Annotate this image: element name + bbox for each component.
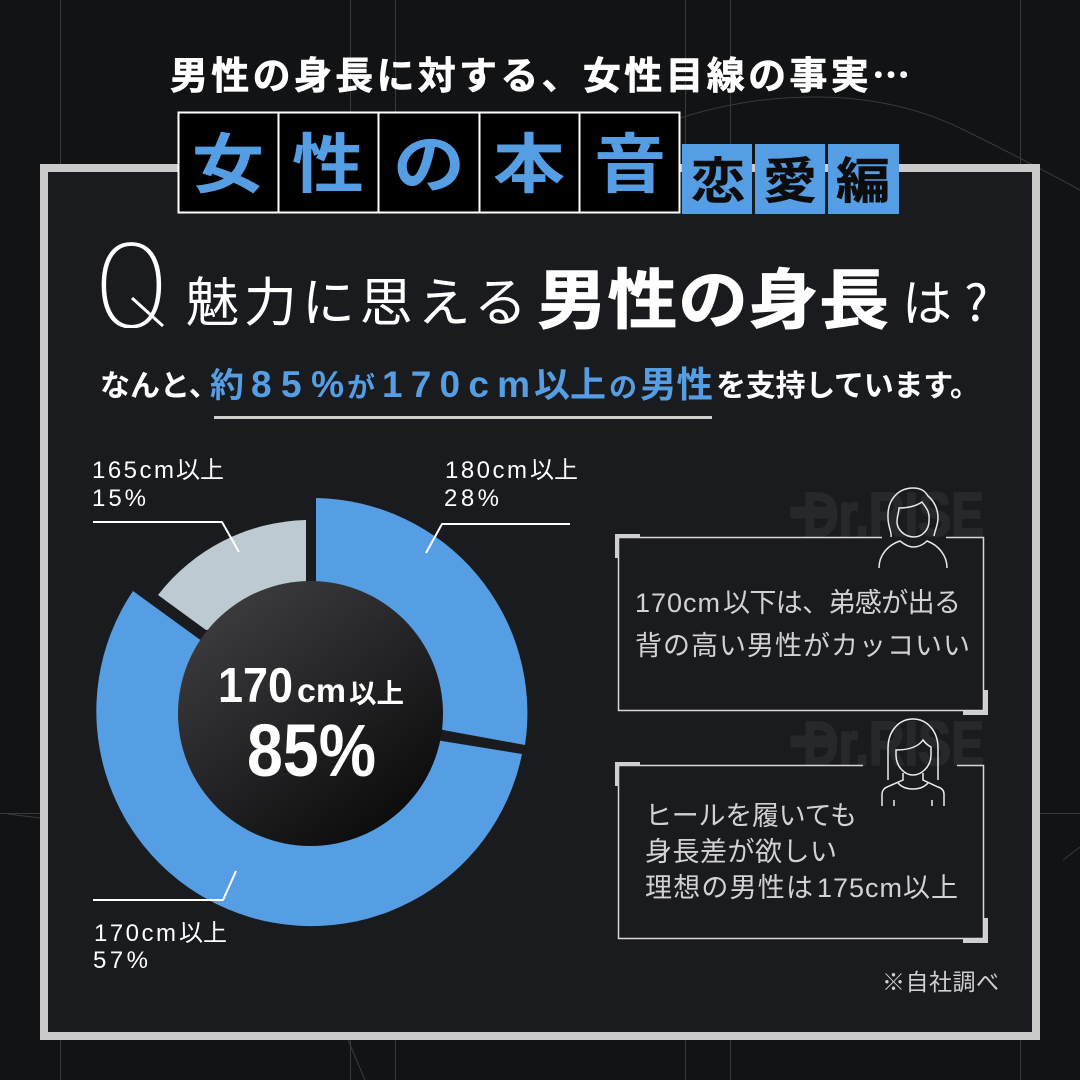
source note: ※自社調べ — [882, 963, 999, 997]
lead sentence — [100, 356, 980, 408]
lead sentence: の — [609, 366, 637, 406]
comment text 2 — [645, 794, 958, 905]
lead sentence: 170cm — [382, 364, 530, 405]
hub text: 170cm以上: 170 — [218, 659, 293, 713]
watermark logo 1: Dr.RISE — [803, 481, 984, 550]
lead sentence: が — [347, 366, 375, 406]
lead sentence: 約 — [210, 358, 244, 407]
label: 165cm: 165cm — [92, 457, 174, 484]
comment text 2: 175cm — [817, 873, 902, 903]
subtitle: 男性の身長に対する、女性目線の事実… — [170, 45, 910, 100]
label: 170cm — [93, 871, 236, 974]
hub text: 170cm以上: 以上 — [349, 672, 404, 711]
comment box 1 — [617, 488, 986, 713]
panel: main frame — [44, 168, 1036, 1036]
segment: 180cm 28% — [316, 498, 527, 745]
title tag: 恋愛編 — [682, 141, 899, 214]
label: 165cm — [92, 450, 239, 552]
title: 女性の本音: の — [393, 112, 465, 206]
label: 180cm: 180cm — [445, 457, 527, 484]
title tag: 恋愛編: 愛 — [763, 141, 817, 212]
watermark logo 2: Dr.RISE — [803, 710, 984, 779]
lead sentence: 男性 — [640, 356, 713, 408]
comment box 2 — [617, 719, 986, 941]
question mark letter Q: Q — [95, 213, 168, 359]
title: 女性の本音 — [178, 112, 680, 213]
title tag: 恋愛編: 編 — [836, 141, 890, 212]
hub text: 170cm以上 — [218, 659, 404, 713]
lead sentence: 以上 — [534, 357, 606, 408]
comment text 1 — [635, 581, 970, 663]
hub text: 170cm以上: cm — [297, 672, 346, 709]
question heading: 魅力に思える — [186, 261, 527, 337]
segment: 165cm 15% — [158, 520, 306, 630]
title: 女性の本音: 音 — [594, 112, 666, 206]
title tag: 恋愛編: 恋 — [691, 141, 745, 212]
segment: 170cm 57% — [96, 591, 522, 926]
comment text 1: 170cm — [635, 588, 720, 618]
icon: woman with long hair — [882, 719, 944, 806]
comment text 2: ヒールを履いても — [645, 794, 857, 833]
question heading: は? — [902, 264, 988, 336]
label: 170cm: 以上 — [179, 913, 227, 948]
title: 女性の本音: 女 — [192, 112, 264, 206]
title: 女性の本音: 本 — [493, 112, 565, 206]
comment text 2: 身長差が欲しい — [645, 830, 837, 869]
label: 170cm: 170cm — [94, 920, 176, 947]
label: 180cm: 以上 — [530, 450, 578, 485]
question heading: 男性の身長 — [537, 249, 889, 342]
title: 女性の本音: 性 — [292, 112, 364, 206]
lead sentence: を支持しています。 — [716, 361, 980, 405]
donut hub — [178, 581, 443, 846]
label: 165cm: 以上 — [176, 450, 224, 485]
comment text 2: 以上 — [903, 866, 958, 905]
label: 170cm: 57% — [93, 947, 148, 974]
hub value: 85%: 85% — [247, 709, 376, 792]
label: 165cm: 15% — [92, 485, 146, 512]
comment text 1: 背の高い男性がカッコいい — [635, 624, 970, 663]
comment text 1: 以下は、弟感が出る — [723, 581, 961, 620]
comment text 2: 理想の男性は — [645, 866, 813, 905]
donut chart — [96, 498, 527, 926]
label: 180cm — [426, 450, 578, 553]
label: 180cm: 28% — [444, 485, 499, 512]
lead sentence: なんと、 — [100, 361, 219, 405]
question heading — [95, 213, 988, 359]
lead sentence: 85% — [251, 364, 344, 405]
icon: woman with short hair — [879, 488, 947, 568]
